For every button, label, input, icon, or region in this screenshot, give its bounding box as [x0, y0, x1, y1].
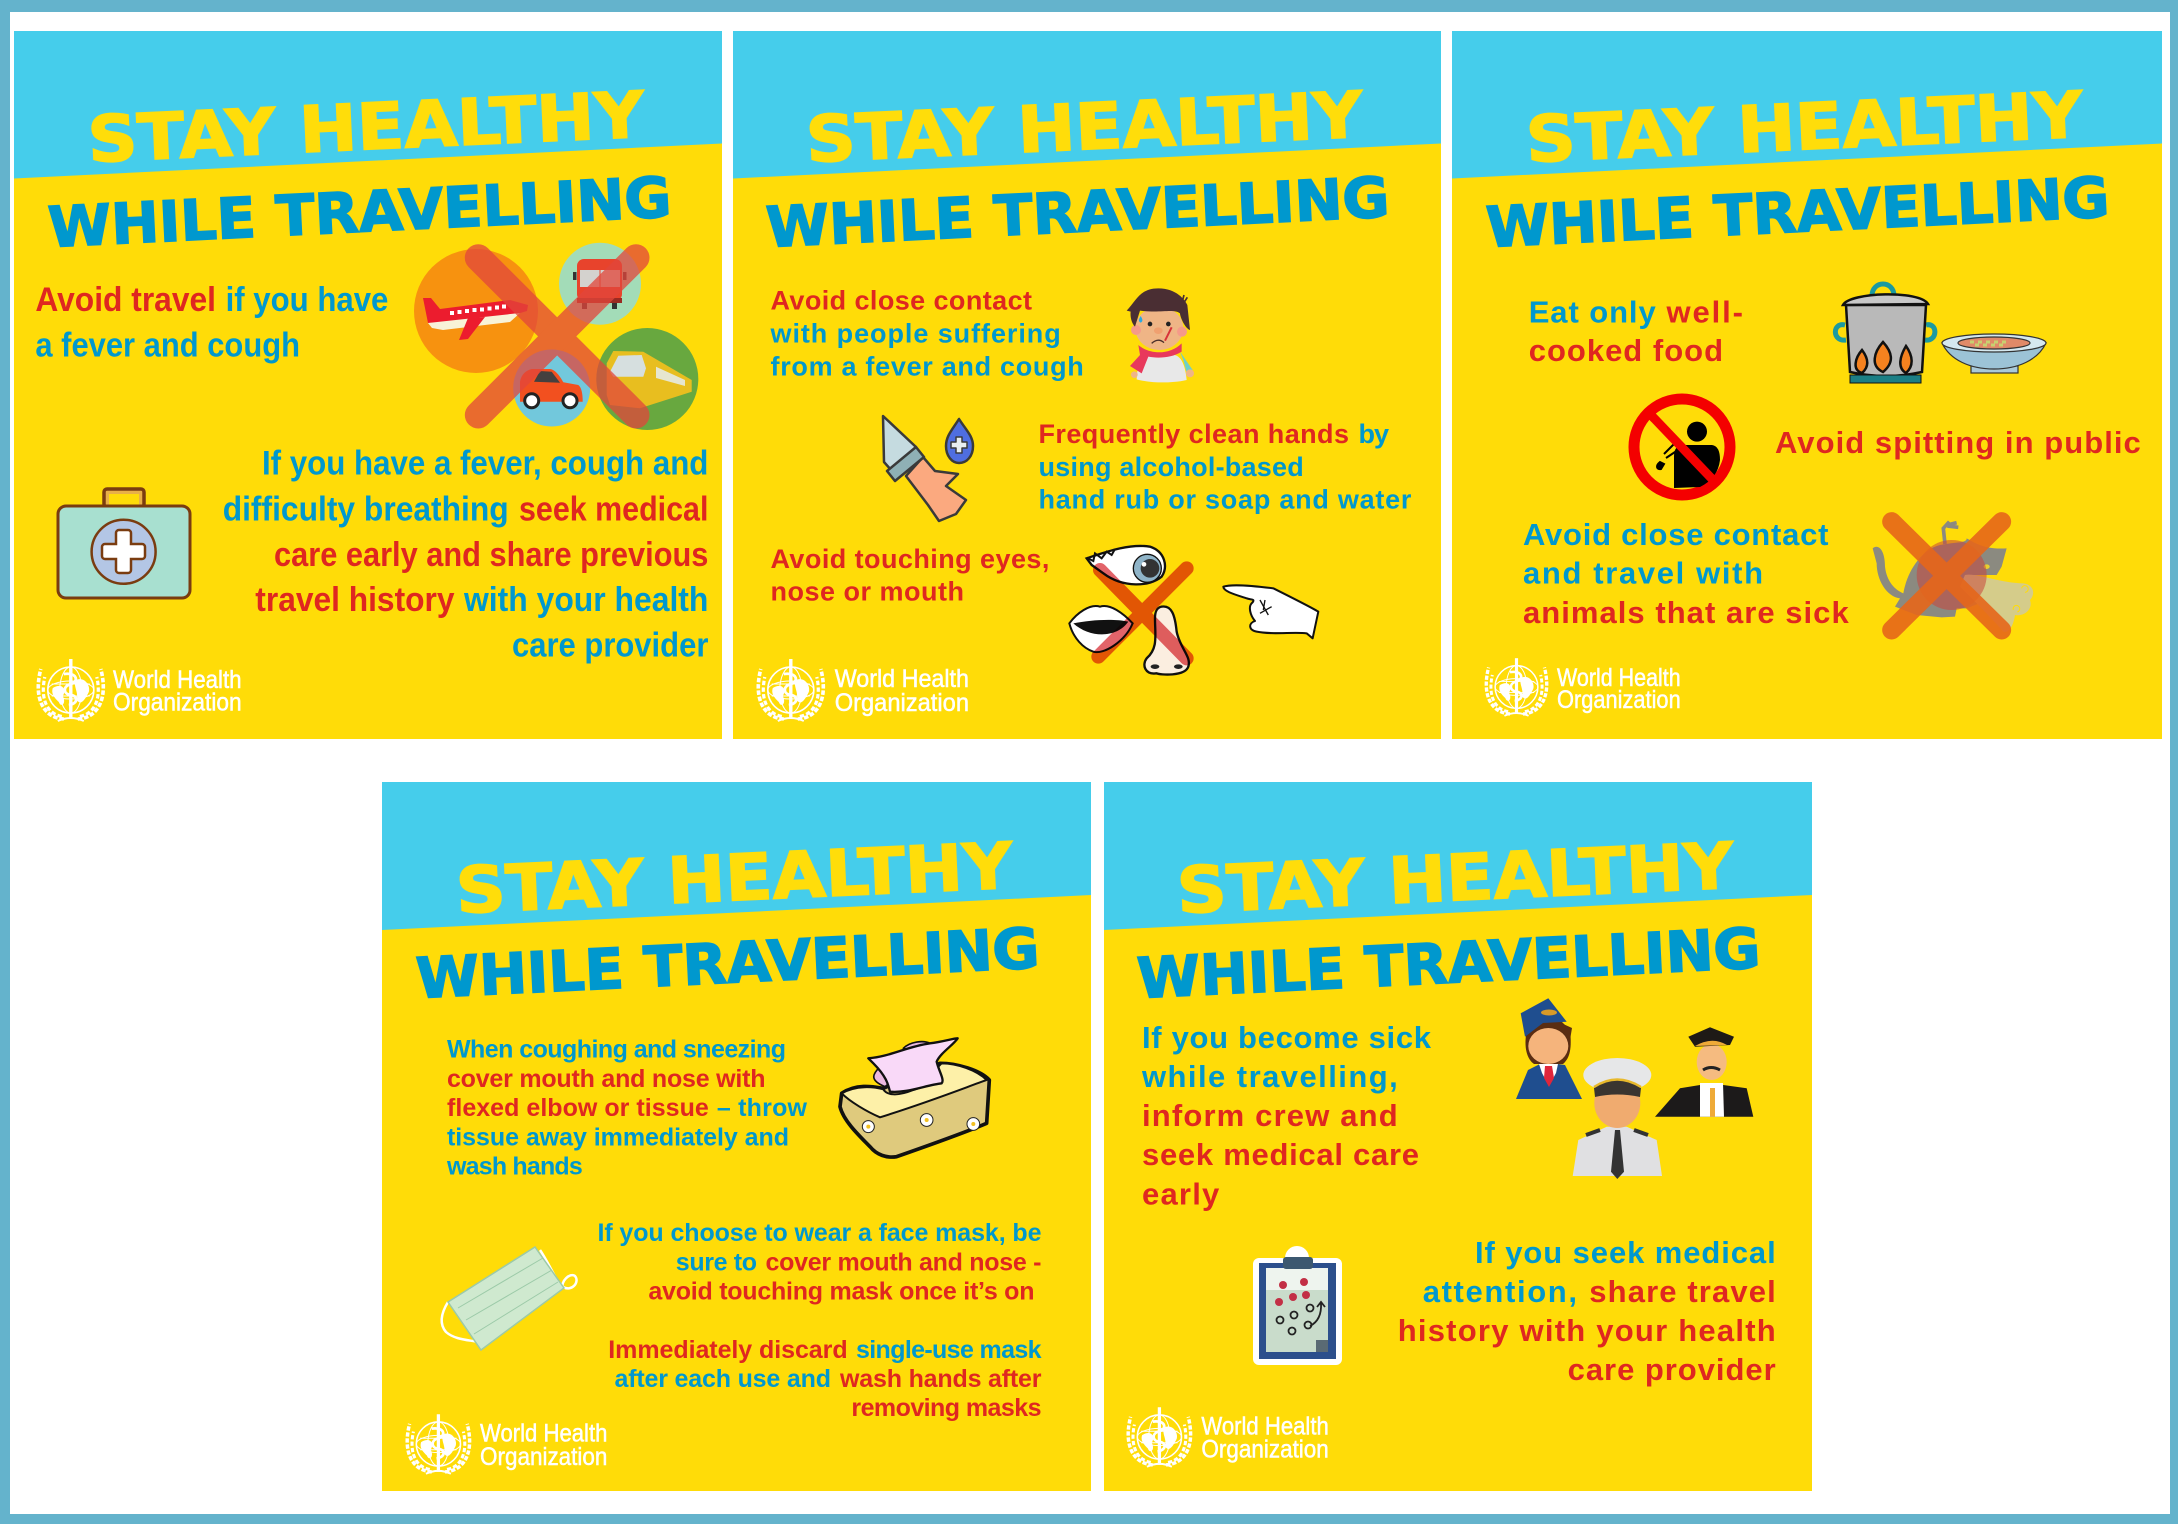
- panel background: [14, 31, 722, 739]
- text: avoid touching face: Avoid touching eyes,: [770, 544, 1049, 574]
- text: inform crew: inform crew and: [1142, 1098, 1398, 1133]
- text: face mask use: sure to: [676, 1249, 757, 1277]
- text: coughing and sneezing: flexed elbow or tissue: [447, 1094, 709, 1122]
- text: sick animals: Avoid close contact: [1523, 517, 1828, 552]
- text: share travel history: attention,: [1423, 1274, 1577, 1309]
- logo: World Health Organization: [758, 659, 969, 721]
- text: clean hands: hand rub or soap and water: [1038, 485, 1412, 515]
- text: seek medical care: with your health: [463, 581, 708, 619]
- panel: sickness while travelling: [1104, 782, 1812, 1491]
- text: avoid close contact: with people suffering: [770, 319, 1061, 349]
- heading: [415, 830, 1041, 1012]
- text: discard mask: wash hands after: [839, 1365, 1042, 1393]
- text: clean hands: Frequently clean hands: [1038, 419, 1349, 449]
- text: seek medical care: seek medical: [519, 491, 708, 529]
- text: well-cooked food: Eat only: [1529, 294, 1656, 330]
- icon: pointing hand: [1223, 585, 1318, 638]
- heading: STAY HEALTHY: [1175, 830, 1736, 929]
- text: discard mask: Immediately discard: [608, 1336, 848, 1364]
- text: avoid travel: a fever and cough: [35, 326, 300, 364]
- text: seek medical care: difficulty breathing: [223, 491, 509, 529]
- icon: crossed out transport: [414, 243, 698, 430]
- heading: STAY HEALTHY: [1524, 79, 2085, 178]
- icon: sick boy: [1127, 288, 1194, 382]
- text: coughing and sneezing: tissue away immediately and: [447, 1124, 789, 1152]
- icon: pilot: [1573, 1058, 1662, 1179]
- panel background: [733, 31, 1441, 739]
- text: discard mask: removing masks: [851, 1394, 1042, 1422]
- text: sick animals: animals that are sick: [1523, 595, 1849, 630]
- heading: WHILE TRAVELLING: [1485, 166, 2111, 261]
- text: face mask use: avoid touching mask once it’s on: [648, 1278, 1034, 1306]
- text: well-cooked food: well-: [1666, 294, 1743, 330]
- text: avoid close contact: [770, 286, 1084, 382]
- icon: crossed out sick cat: [1873, 522, 2033, 632]
- icon: crossed out eye, nose and mouth: [1069, 546, 1189, 675]
- text: seek medical care: care provider: [512, 626, 708, 664]
- logo: World Health Organization: [1128, 1407, 1329, 1467]
- text: share travel history: [1398, 1235, 1776, 1387]
- heading: WHILE TRAVELLING: [47, 166, 673, 261]
- icon: face mask: [442, 1247, 577, 1350]
- text: seek medical care: care early and share previous: [274, 536, 708, 574]
- text: seek medical care: travel history: [255, 581, 455, 619]
- panel: coughing and masks: [382, 782, 1091, 1491]
- text: inform crew: while travelling,: [1141, 1059, 1398, 1094]
- text: discard mask: after each use and: [614, 1365, 831, 1393]
- text: seek medical care: [223, 445, 708, 664]
- panel: avoid travel and seek care: [14, 31, 722, 739]
- heading: STAY HEALTHY: [804, 79, 1365, 178]
- heading: STAY HEALTHY: [86, 79, 647, 178]
- text: sick animals: [1523, 517, 1849, 630]
- heading: WHILE TRAVELLING: [765, 166, 1391, 261]
- text: inform crew: [1141, 1020, 1432, 1211]
- text: clean hands: [1038, 419, 1412, 515]
- icon: first aid kit: [58, 489, 190, 598]
- text: seek medical care: If you have a fever, cough and: [262, 445, 708, 483]
- text: clean hands: using alcohol-based: [1038, 452, 1304, 482]
- text: inform crew: If you become sick: [1142, 1020, 1432, 1055]
- text: clean hands: by: [1358, 419, 1389, 449]
- text: coughing and sneezing: cover mouth and nose with: [447, 1065, 766, 1093]
- icon: cooking pot: [1835, 284, 1935, 383]
- text: discard mask: single-use mask: [856, 1336, 1042, 1364]
- heading: [47, 79, 673, 261]
- text: avoid spitting: Avoid spitting in public: [1775, 425, 2141, 460]
- heading: STAY HEALTHY: [454, 830, 1015, 929]
- text: avoid travel: if you have: [226, 281, 388, 319]
- logo: World Health Organization: [38, 659, 242, 721]
- panel: food, spitting and animals: [1452, 31, 2162, 739]
- text: inform crew: early: [1142, 1176, 1220, 1211]
- text: avoid travel: [35, 281, 388, 364]
- text: coughing and sneezing: When coughing and sneezing: [447, 1035, 786, 1063]
- heading: [1485, 79, 2111, 261]
- text: well-cooked food: cooked food: [1529, 333, 1723, 368]
- text: inform crew: seek medical care: [1142, 1137, 1419, 1172]
- text: face mask use: [598, 1219, 1042, 1306]
- text: share travel history: If you seek medical: [1475, 1235, 1776, 1270]
- text: avoid travel: Avoid travel: [35, 281, 216, 319]
- text: avoid touching face: nose or mouth: [770, 576, 964, 606]
- logo: World Health Organization: Organization: [835, 689, 969, 717]
- text: well-cooked food: [1529, 294, 1743, 368]
- heading: [765, 79, 1391, 261]
- panel background: [382, 782, 1091, 1491]
- text: coughing and sneezing: [446, 1035, 808, 1180]
- panel background: [1452, 31, 2162, 739]
- text: avoid close contact: Avoid close contact: [770, 286, 1032, 316]
- icon: hand washing: [883, 416, 973, 521]
- panel background: [1104, 782, 1812, 1491]
- icon: flight crew: [1516, 998, 1753, 1179]
- text: sick animals: and travel with: [1523, 556, 1763, 591]
- logo: World Health Organization: World Health: [113, 666, 242, 694]
- icon: flight attendant: [1516, 998, 1582, 1099]
- text: share travel history: share travel: [1589, 1274, 1776, 1309]
- logo: World Health Organization: Organization: [113, 688, 242, 716]
- logo: World Health Organization: Organization: [480, 1443, 607, 1471]
- icon: ship officer: [1655, 1027, 1753, 1117]
- panel: contact and hand hygiene: [733, 31, 1441, 739]
- icon: tissue box: [840, 1038, 989, 1157]
- text: discard mask: [608, 1336, 1042, 1422]
- icon: clipboard: [1253, 1246, 1342, 1365]
- heading: [1136, 830, 1762, 1012]
- text: avoid touching face: [770, 544, 1049, 606]
- icon: no spitting sign: [1634, 399, 1730, 495]
- logo: World Health Organization: World Health: [480, 1420, 607, 1448]
- text: share travel history: history with your health: [1398, 1313, 1776, 1348]
- text: face mask use: If you choose to wear a face mask, be: [598, 1219, 1042, 1247]
- logo: World Health Organization: Organization: [1557, 686, 1681, 714]
- logo: World Health Organization: World Health: [1201, 1412, 1329, 1440]
- logo: World Health Organization: World Health: [1557, 664, 1681, 692]
- logo: World Health Organization: [407, 1414, 607, 1474]
- logo: World Health Organization: World Health: [835, 665, 969, 693]
- text: coughing and sneezing: – throw: [717, 1094, 808, 1122]
- text: avoid close contact: from a fever and cough: [770, 352, 1084, 382]
- text: share travel history: care provider: [1568, 1352, 1776, 1387]
- text: face mask use: cover mouth and nose -: [766, 1249, 1042, 1277]
- logo: World Health Organization: Organization: [1201, 1436, 1329, 1464]
- text: coughing and sneezing: wash hands: [446, 1152, 583, 1180]
- logo: World Health Organization: [1486, 658, 1681, 716]
- heading: WHILE TRAVELLING: [415, 917, 1041, 1012]
- heading: WHILE TRAVELLING: [1136, 917, 1762, 1012]
- icon: bowl of food: [1942, 334, 2046, 373]
